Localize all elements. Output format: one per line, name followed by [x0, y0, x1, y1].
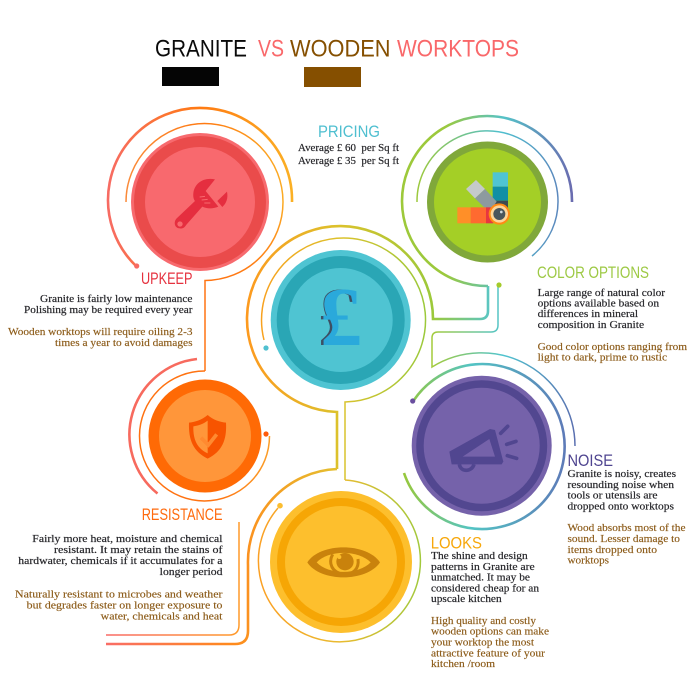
- pricing heading: PRICING: [318, 122, 380, 141]
- pricing arcs: [247, 226, 488, 480]
- upkeep wooden text: [8, 326, 192, 349]
- upkeep granite text: Polishing may be required every year: [24, 304, 193, 316]
- noise granite text: [568, 468, 676, 512]
- noise granite text: dropped onto worktops: [568, 500, 674, 512]
- color heading: COLOR OPTIONS: [537, 263, 649, 282]
- noise arcs: [404, 282, 575, 529]
- looks granite text: patterns in Granite are: [431, 561, 535, 573]
- resistance wooden text: water, chemicals and heat: [101, 610, 222, 622]
- looks granite text: unmatched. It may be: [431, 572, 530, 584]
- looks wooden text: kitchen /room: [431, 658, 496, 670]
- icon: eye: [307, 547, 380, 577]
- pricing text: Average £ 35 per Sq ft: [298, 155, 399, 167]
- color medallion: [427, 142, 548, 262]
- icon: megaphone: [449, 426, 517, 470]
- resistance granite text: Fairly more heat, moisture and chemical: [32, 533, 222, 545]
- upkeep wooden text: Wooden worktops will require oiling 2-3: [8, 326, 192, 338]
- title: [155, 36, 519, 62]
- icon: wrench: [175, 179, 227, 228]
- looks granite text: [431, 550, 540, 605]
- panel: pricing: [247, 122, 488, 480]
- looks heading: LOOKS: [431, 534, 482, 552]
- noise granite text: resounding noise when: [568, 479, 675, 491]
- looks wooden text: [431, 615, 549, 670]
- looks granite text: upscale kitchen: [431, 593, 502, 605]
- noise wooden text: Wood absorbs most of the: [568, 522, 686, 534]
- upkeep granite text: [24, 293, 193, 316]
- panel: looks: [106, 469, 549, 670]
- color arcs: [402, 116, 572, 286]
- legend swatch: wooden: [304, 67, 361, 87]
- color wooden text: [538, 341, 688, 364]
- resistance wooden text: [15, 588, 223, 622]
- title: WOODEN: [290, 36, 390, 62]
- noise granite text: Granite is noisy, creates: [568, 468, 676, 480]
- looks medallion: [270, 491, 412, 633]
- icon: pound sign: £: [316, 271, 358, 364]
- color wooden text: Good color options ranging from: [538, 341, 688, 353]
- title: GRANITE: [155, 36, 247, 62]
- pricing medallion: [271, 250, 411, 390]
- looks wooden text: attractive feature of your: [431, 648, 545, 660]
- noise wooden text: [568, 522, 686, 566]
- resistance wooden text: Naturally resistant to microbes and weather: [15, 588, 223, 600]
- panel: noise: [404, 282, 686, 566]
- color granite text: [538, 287, 666, 331]
- color granite text: options available based on: [538, 298, 660, 310]
- resistance granite text: hardwater, chemicals if it accumulates for a: [18, 555, 223, 567]
- looks granite text: considered cheap for an: [431, 582, 540, 594]
- legend swatch: granite: [162, 67, 219, 86]
- pricing text: [298, 142, 399, 167]
- noise medallion: [412, 376, 552, 516]
- looks wooden text: wooden options can make: [431, 626, 549, 638]
- looks wooden text: your worktop the most: [431, 636, 534, 648]
- upkeep medallion: [131, 133, 269, 271]
- icon: pound sign: £: [320, 271, 362, 364]
- upkeep wooden text: times a year to avoid damages: [55, 337, 192, 349]
- panel: upkeep: [8, 108, 292, 371]
- color granite text: Large range of natural color: [538, 287, 666, 299]
- panel: resistance: [15, 359, 270, 635]
- noise wooden text: items dropped onto: [568, 544, 657, 556]
- resistance granite text: longer period: [160, 566, 223, 578]
- title: WORKTOPS: [397, 36, 519, 62]
- icon: colour swatches: [457, 172, 510, 225]
- icon: shield: [189, 415, 226, 459]
- resistance heading: RESISTANCE: [142, 505, 222, 524]
- color wooden text: light to dark, prime to rustic: [538, 352, 667, 364]
- looks granite text: The shine and design: [431, 550, 528, 562]
- title: VS: [258, 36, 284, 62]
- looks wooden text: High quality and costly: [431, 615, 537, 627]
- panel: color options: [402, 116, 688, 364]
- resistance granite text: resistant. It may retain the stains of: [54, 544, 223, 556]
- upkeep granite text: Granite is fairly low maintenance: [40, 293, 193, 305]
- upkeep heading: UPKEEP: [141, 269, 192, 288]
- noise granite text: tools or utensils are: [568, 490, 658, 502]
- noise heading: NOISE: [568, 451, 613, 470]
- resistance wooden text: but degrades faster on longer exposure to: [27, 600, 223, 612]
- color granite text: composition in Granite: [538, 319, 644, 331]
- resistance granite text: [18, 533, 223, 578]
- resistance arcs: [106, 359, 270, 635]
- color granite text: differences in mineral: [538, 308, 638, 320]
- pricing text: Average £ 60 per Sq ft: [298, 142, 399, 154]
- upkeep arcs: [108, 108, 292, 371]
- looks arcs: [106, 469, 420, 644]
- resistance medallion: [148, 380, 262, 492]
- noise wooden text: worktops: [568, 554, 609, 566]
- noise wooden text: sound. Lesser damage to: [568, 533, 680, 545]
